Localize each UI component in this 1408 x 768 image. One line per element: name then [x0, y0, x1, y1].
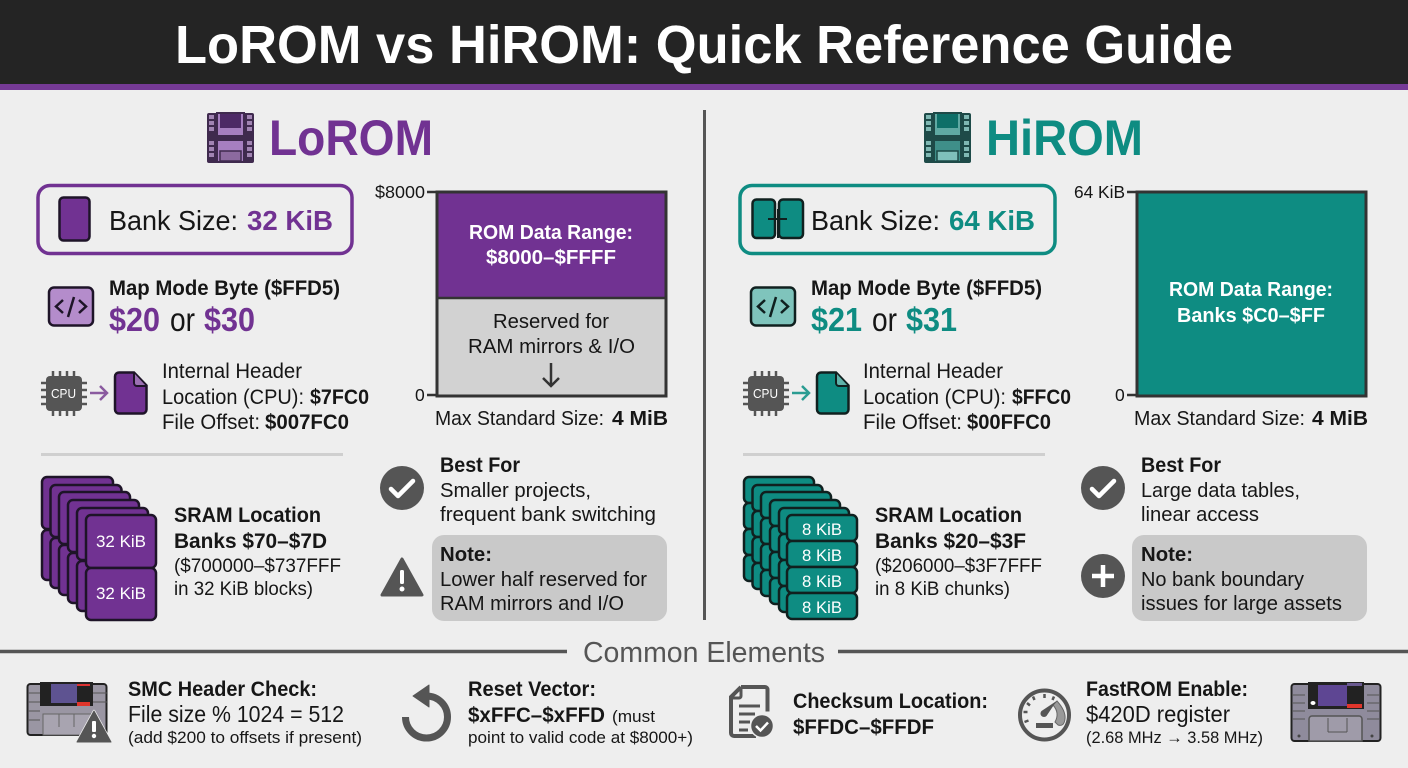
- internal header location: [162, 360, 369, 434]
- icon: check: [380, 466, 424, 510]
- SRAM location: SRAM Location: [875, 503, 1022, 527]
- icon: SRAM chunk stack: 8 KiB: [802, 546, 842, 565]
- icon: cartridge: [1292, 682, 1380, 741]
- memory map chart: $8000: [375, 182, 425, 202]
- map mode byte: Map Mode Byte ($FFD5): [811, 276, 1042, 300]
- memory map chart: 4 MiB: [612, 408, 668, 430]
- internal header location: $FFC0: [1012, 386, 1071, 409]
- icon: SRAM block stack: 32 KiB: [96, 584, 146, 603]
- memory map chart: 0: [415, 385, 425, 405]
- panel: LoROM: [38, 110, 668, 621]
- note: No bank boundary: [1141, 568, 1305, 591]
- memory map chart: 0: [1115, 385, 1125, 405]
- SRAM location: ($206000–$3F7FFF: [875, 555, 1042, 577]
- internal header location: Internal Header: [162, 360, 302, 383]
- icon: code tag: [751, 288, 795, 326]
- reserved segment: RAM mirrors & I/O: [468, 335, 635, 358]
- bank size box: [740, 186, 1055, 254]
- FastROM enable: (2.68 MHz → 3.58 MHz): [1086, 728, 1263, 747]
- FastROM enable: FastROM Enable:: [1086, 678, 1248, 701]
- icon: LoROM cartridge: [207, 112, 254, 163]
- ROM data segment: ROM Data Range:: [1169, 279, 1333, 301]
- bank size box: [38, 186, 352, 254]
- reset vector: Reset Vector:: [468, 678, 596, 701]
- reset vector: point to valid code at $8000+): [468, 728, 693, 747]
- best for: Best For: [440, 454, 520, 477]
- best for: Smaller projects,: [440, 479, 591, 502]
- icon: CPU to file: CPU: [51, 387, 76, 401]
- internal header location: File Offset:: [863, 411, 962, 434]
- icon: warning: [382, 559, 422, 595]
- map mode byte: or: [170, 301, 195, 338]
- bank size label: Bank Size:: [109, 205, 238, 236]
- SRAM location: [875, 503, 1042, 600]
- best for: Large data tables,: [1141, 479, 1300, 502]
- icon: SRAM block stack: 32 KiB: [96, 532, 146, 551]
- memory map chart: [375, 182, 668, 430]
- icon: SRAM block stack: [42, 477, 156, 620]
- icon: SRAM chunk stack: [744, 477, 857, 619]
- map mode byte: $31: [906, 301, 957, 338]
- icon: SRAM chunk stack: 8 KiB: [802, 572, 842, 591]
- internal header location: Location (CPU):: [863, 386, 1006, 409]
- SMC header check: File size % 1024 = 512: [128, 701, 344, 727]
- map mode byte: $21: [811, 301, 862, 338]
- reserved segment: [437, 298, 666, 396]
- internal header location: $7FC0: [310, 386, 369, 409]
- icon: plus: [1081, 554, 1125, 598]
- SRAM location: ($700000–$737FFF: [174, 555, 341, 577]
- map mode byte: [811, 276, 1042, 338]
- icon: code tag: [49, 288, 93, 326]
- internal header location: Internal Header: [863, 360, 1003, 383]
- heading: LoROM: LoROM: [269, 110, 433, 166]
- title banner: [0, 0, 1408, 90]
- reset vector: (must: [612, 707, 655, 726]
- panel: HiROM: [740, 110, 1368, 621]
- icon: speed gauge: [1020, 690, 1069, 740]
- icon: HiROM cartridge: [924, 112, 971, 163]
- SRAM location: [174, 503, 341, 600]
- best for: [440, 454, 656, 526]
- bank size label: Bank Size:: [811, 205, 940, 236]
- map mode byte: Map Mode Byte ($FFD5): [109, 276, 340, 300]
- icon: checksum document: [731, 687, 774, 738]
- icon: cartridge with warning: [28, 682, 111, 742]
- note: issues for large assets: [1141, 592, 1342, 615]
- note: Lower half reserved for: [440, 568, 647, 591]
- note: RAM mirrors and I/O: [440, 592, 624, 615]
- internal header location: $00FFC0: [967, 411, 1051, 434]
- ROM data segment: ROM Data Range:: [469, 222, 633, 244]
- checksum location: $FFDC–$FFDF: [793, 715, 934, 739]
- map mode byte: [109, 276, 340, 338]
- map mode byte: or: [872, 301, 897, 338]
- SRAM location: Banks $70–$7D: [174, 529, 327, 553]
- SMC header check: SMC Header Check:: [128, 678, 317, 701]
- note: Note:: [1141, 543, 1193, 566]
- best for: linear access: [1141, 503, 1259, 526]
- memory map chart: Max Standard Size:: [435, 408, 604, 430]
- checksum location: Checksum Location:: [793, 690, 988, 713]
- icon: CPU to file: CPU: [753, 387, 778, 401]
- SRAM location: in 32 KiB blocks): [174, 578, 313, 600]
- icon: 64 KiB bank: [752, 200, 803, 238]
- reset vector: $xFFC–$xFFD: [468, 703, 605, 727]
- icon: reset arrow: [406, 685, 448, 738]
- ROM data segment: [1137, 192, 1366, 396]
- SRAM location: Banks $20–$3F: [875, 529, 1026, 553]
- icon: SRAM chunk stack: 8 KiB: [802, 520, 842, 539]
- memory map chart: 64 KiB: [1074, 182, 1125, 202]
- memory map chart: Max Standard Size:: [1134, 408, 1305, 430]
- memory map chart: [1074, 182, 1368, 430]
- icon: CPU to file: [743, 371, 848, 416]
- title banner: LoROM vs HiROM: Quick Reference Guide: [175, 15, 1233, 75]
- FastROM enable: [1086, 678, 1263, 747]
- best for: Best For: [1141, 454, 1221, 477]
- SMC header check: [128, 678, 362, 747]
- icon: check: [1081, 466, 1125, 510]
- internal header location: [863, 360, 1071, 434]
- map mode byte: $30: [204, 301, 255, 338]
- internal header location: File Offset:: [162, 411, 260, 434]
- FastROM enable: $420D register: [1086, 701, 1230, 727]
- SRAM location: SRAM Location: [174, 503, 321, 527]
- SRAM location: in 8 KiB chunks): [875, 578, 1010, 600]
- note: [1132, 535, 1367, 621]
- icon: SRAM chunk stack: 8 KiB: [802, 598, 842, 617]
- ROM data segment: Banks $C0–$FF: [1177, 305, 1325, 327]
- panel: common elements: [0, 637, 1408, 747]
- internal header location: Location (CPU):: [162, 386, 304, 409]
- ROM data segment: $8000–$FFFF: [486, 247, 616, 269]
- ROM data segment: [437, 192, 666, 298]
- SMC header check: (add $200 to offsets if present): [128, 728, 362, 747]
- note: [432, 535, 667, 621]
- bank size value: 64 KiB: [949, 205, 1035, 236]
- internal header location: $007FC0: [265, 411, 349, 434]
- bank size value: 32 KiB: [247, 205, 333, 236]
- icon: 32 KiB bank: [60, 198, 90, 240]
- note: Note:: [440, 543, 492, 566]
- checksum location: [793, 690, 988, 739]
- icon: CPU to file: [41, 371, 146, 416]
- memory map chart: 4 MiB: [1312, 408, 1368, 430]
- heading: HiROM: HiROM: [986, 110, 1143, 166]
- heading: common elements: Common Elements: [583, 637, 825, 669]
- best for: [1141, 454, 1300, 526]
- map mode byte: $20: [109, 301, 160, 338]
- reserved segment: Reserved for: [493, 310, 609, 333]
- reset vector: [468, 678, 693, 747]
- best for: frequent bank switching: [440, 503, 656, 526]
